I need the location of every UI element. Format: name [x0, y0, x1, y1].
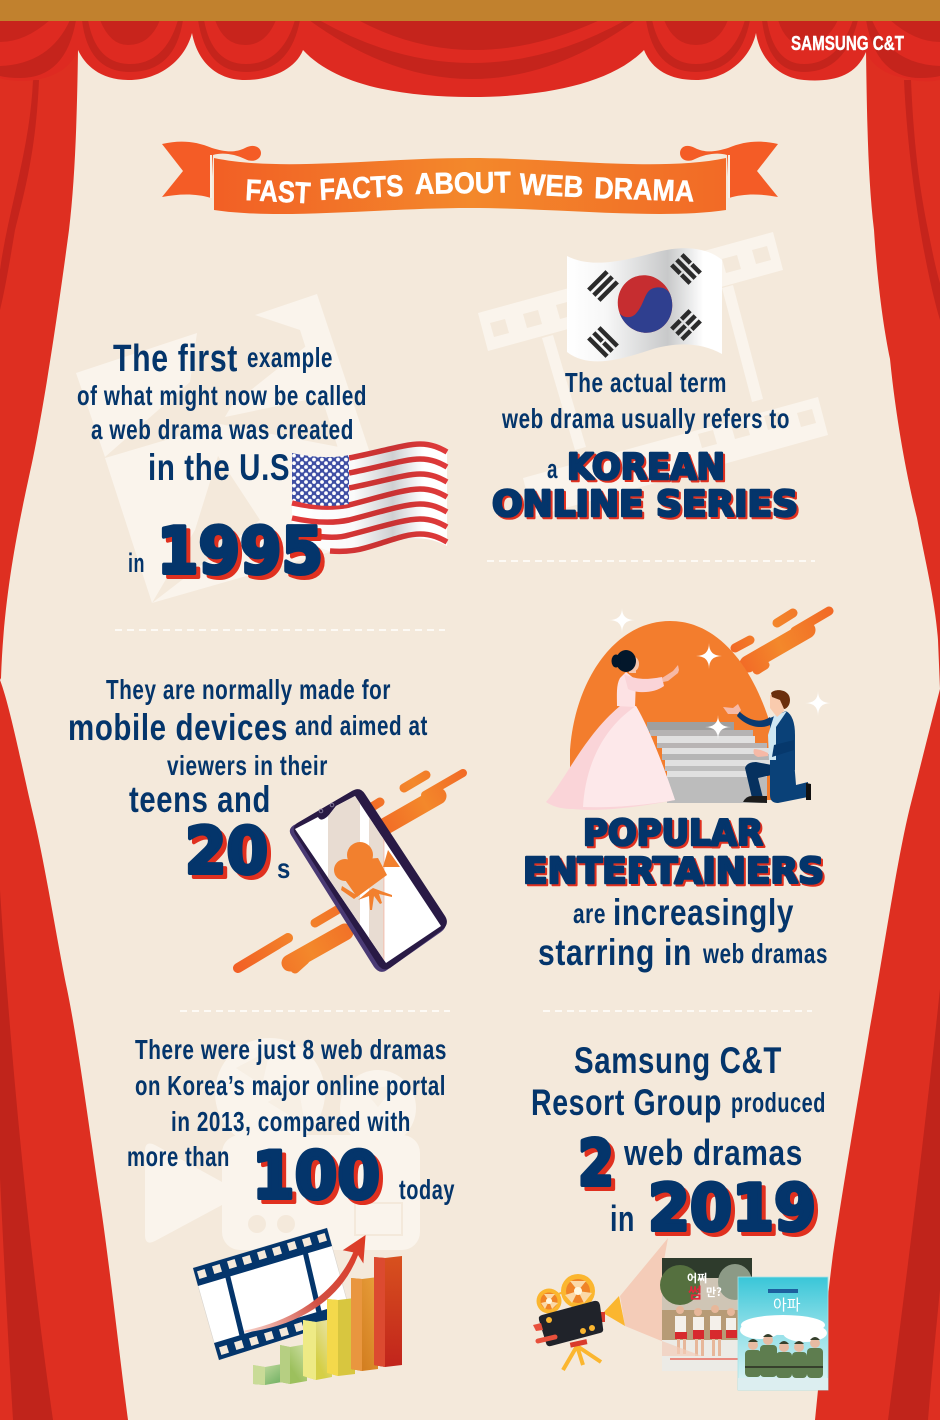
fact 4 text: increasingly	[613, 892, 794, 933]
sparkles	[609, 608, 831, 740]
title text: WEB	[519, 168, 584, 204]
fact 1 text: in the U.S.	[148, 447, 299, 488]
poster 1: 썸	[688, 1282, 702, 1303]
right curtain	[815, 50, 940, 1420]
fact 4 text: are	[573, 898, 606, 929]
fact 3 text: viewers in their	[167, 750, 328, 781]
fact 4 text: web dramas	[702, 938, 828, 969]
title banner	[162, 142, 778, 214]
fact 2 text	[501, 367, 790, 484]
fact 5 text: today	[399, 1174, 455, 1205]
illustration: couple on stairs	[546, 608, 831, 810]
fact 2 text: The actual term	[565, 367, 727, 398]
title text: FACTS	[319, 170, 404, 207]
fact 4 text: starring in	[538, 932, 692, 973]
background icon: clapperboard	[76, 294, 388, 603]
fact 5 text	[127, 1034, 455, 1205]
title text: FAST	[245, 174, 311, 210]
fact 3 text: mobile devices	[68, 707, 288, 748]
fact 6 text: web dramas	[623, 1132, 803, 1173]
fact 5 text: There were just 8 web dramas	[135, 1034, 447, 1065]
icon: US flag	[292, 441, 447, 551]
taeguk	[610, 268, 680, 340]
camera glyph	[334, 842, 400, 910]
number: 20: 20	[185, 815, 268, 889]
left curtain	[0, 50, 128, 1420]
fact 1 text: in	[128, 548, 145, 578]
fact 1 text	[77, 338, 367, 578]
icon: film projector	[533, 1274, 625, 1370]
number: 100: 100	[252, 1139, 380, 1214]
poster 1: 어쩌	[687, 1270, 707, 1286]
icon: film frame	[193, 1228, 352, 1360]
poster 1	[660, 1258, 752, 1371]
headline: Korean online series: KOREAN	[567, 447, 725, 488]
curtain valance	[0, 20, 940, 97]
arrow: growth	[245, 1236, 365, 1332]
fact 6 text: in	[610, 1198, 635, 1239]
headline: popular entertainers: POPULAR	[583, 813, 763, 854]
fact 1 text: example	[247, 342, 333, 373]
background icon: movie camera	[145, 1038, 420, 1250]
poster 2: 아파	[773, 1294, 801, 1315]
fact 3 text	[68, 674, 428, 884]
fact 2 text: web drama usually refers to	[501, 403, 790, 434]
poster 1: 만?	[706, 1284, 722, 1300]
fact 5 text: in 2013, compared with	[171, 1106, 411, 1137]
fact 3 text: teens and	[129, 779, 271, 820]
headline: Korean online series: ONLINE SERIES	[492, 484, 798, 525]
fact 6 text: Resort Group	[531, 1082, 722, 1123]
background icon: film strip	[478, 232, 828, 517]
number: 2: 2	[578, 1127, 614, 1200]
title text	[245, 166, 695, 210]
headline: popular entertainers: ENTERTAINERS	[523, 851, 824, 892]
fact 5 text: more than	[127, 1141, 230, 1172]
fact 1 text: a web drama was created	[91, 414, 354, 445]
headline: popular entertainers	[523, 813, 824, 892]
divider	[115, 561, 815, 1011]
fact 2 text: a	[547, 454, 558, 484]
arch	[570, 621, 772, 800]
fact 3 text: and aimed at	[295, 710, 428, 741]
icon: smartphone with camera	[290, 780, 447, 980]
fact 1 text: of what might now be called	[77, 380, 367, 411]
icon: orange streaks behind couple	[735, 611, 829, 670]
fact 3 text: They are normally made for	[106, 674, 391, 705]
man	[723, 690, 811, 803]
projector beam	[620, 1238, 668, 1342]
title text: ABOUT	[415, 166, 511, 201]
trigrams	[587, 253, 702, 358]
icon: Korean flag	[567, 248, 722, 361]
icon: orange streaks behind phone	[238, 773, 463, 969]
woman	[546, 650, 679, 810]
logo: Samsung C&T: SAMSUNG C&T	[791, 33, 904, 55]
poster 2	[738, 1277, 828, 1390]
fact 6 text: Samsung C&T	[574, 1040, 782, 1081]
fact 6 text: produced	[731, 1087, 826, 1118]
number: 1995: 1995	[157, 515, 323, 589]
fact 1 text: The first	[113, 338, 238, 380]
fact 5 text: on Korea’s major online portal	[135, 1070, 446, 1101]
fact 3 text: s	[277, 853, 291, 884]
icon: bar chart	[253, 1256, 402, 1385]
headline: Korean online series	[492, 447, 798, 525]
stairs	[647, 722, 775, 803]
fact 6 text	[531, 1040, 826, 1239]
title text: DRAMA	[594, 172, 695, 208]
gold top bar	[0, 0, 940, 21]
number: 2019: 2019	[648, 1172, 816, 1246]
fact 4 text	[538, 892, 828, 973]
